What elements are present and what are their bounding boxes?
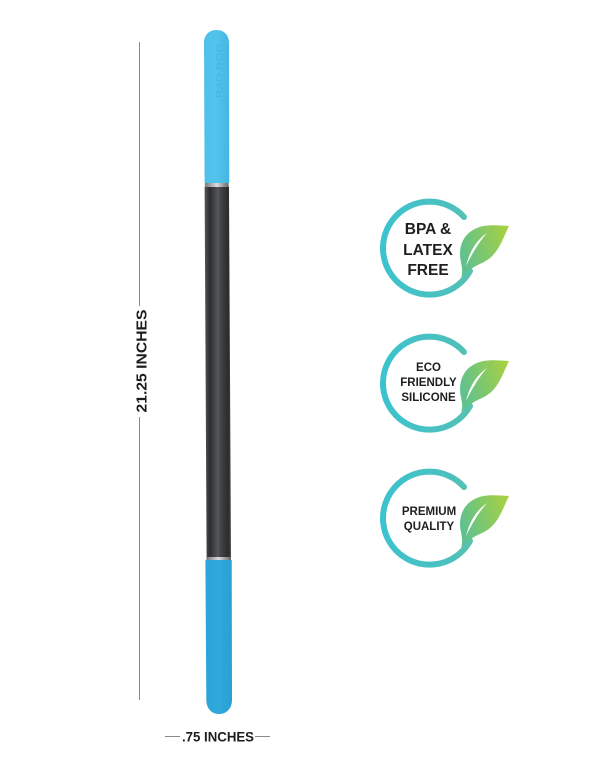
badge text: FRIENDLY xyxy=(400,377,457,389)
badge: eco friendly silicone xyxy=(383,337,509,430)
badge text: FREE xyxy=(407,262,449,279)
lower metal collar xyxy=(206,557,231,560)
badge text: BPA & xyxy=(405,221,451,238)
width label: .75 inches: .75 INCHES xyxy=(182,728,254,744)
lower blue cap xyxy=(205,560,232,714)
badge: BPA and latex free xyxy=(383,202,509,295)
upper metal collar xyxy=(205,183,229,187)
badge text: LATEX xyxy=(403,242,453,259)
leaf vein xyxy=(466,503,487,536)
leaf vein xyxy=(466,368,487,401)
leaf xyxy=(460,360,509,413)
ring xyxy=(383,337,470,430)
leaf xyxy=(460,495,509,548)
ring xyxy=(383,202,470,295)
height label: 21.25 INCHES xyxy=(134,310,150,412)
ring xyxy=(383,472,470,565)
product: rod with silicone caps xyxy=(204,30,232,714)
badge text: QUALITY xyxy=(404,521,455,533)
rod shaft xyxy=(205,187,231,558)
upper blue cap xyxy=(204,30,229,183)
badge text: PREMIUM xyxy=(402,506,456,518)
leaf xyxy=(460,225,509,278)
leaf vein xyxy=(466,233,487,266)
badge: premium quality xyxy=(383,472,509,565)
badge text: ECO xyxy=(416,362,441,374)
badge text: SILICONE xyxy=(401,392,456,404)
cap logo: RAD ROD xyxy=(214,43,224,98)
